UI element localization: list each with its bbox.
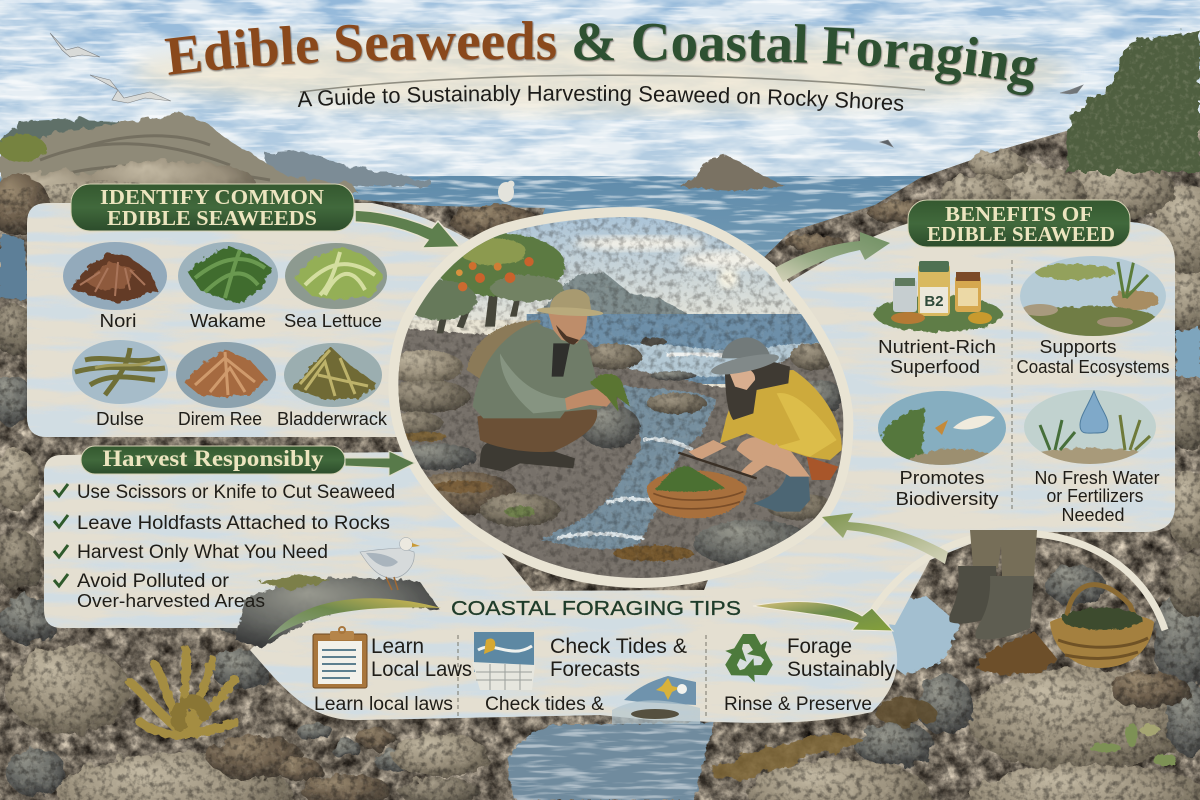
label: promotes biodiversity xyxy=(896,467,999,509)
text: check tides caption: Check tides & xyxy=(485,694,604,715)
label: supports coastal ecosystems xyxy=(1016,336,1170,377)
banner: benefits of edible seaweed: EDIBLE SEAWEED xyxy=(927,222,1115,246)
label: bladderwrack: Bladderwrack xyxy=(277,408,388,429)
divider xyxy=(1011,260,1013,510)
icon: recycle xyxy=(719,634,778,686)
label: supports coastal ecosystems: Coastal Ecosystems xyxy=(1016,356,1170,377)
gull on distant rock xyxy=(498,180,514,202)
benefit illustration: coastal ecosystem xyxy=(1018,255,1168,338)
scene: stream xyxy=(540,383,717,549)
rock outcrop with seaweed under gull xyxy=(235,574,440,648)
banner: benefits of edible seaweed: BENEFITS OF xyxy=(945,202,1093,226)
label: wakame: Wakame xyxy=(190,310,266,331)
label: no fresh water or fertilizers needed: No Fresh Water xyxy=(1034,467,1160,488)
text: rinse and preserve caption: Rinse & Preserve xyxy=(724,694,872,715)
label: nutrient-rich superfood: Nutrient-Rich xyxy=(878,336,996,357)
arrow: harvest to scene xyxy=(345,451,415,476)
benefit illustration: water drop xyxy=(1024,390,1156,464)
background: stream ripples xyxy=(508,722,715,800)
seaweed thumbnail: sea lettuce xyxy=(285,243,387,309)
icon: tide map xyxy=(472,632,535,690)
text: forage sustainably xyxy=(787,635,895,681)
label: nutrient-rich superfood xyxy=(878,336,996,377)
arrow: vignette to scene xyxy=(822,513,948,564)
benefit illustration: nutrient jars: B2 xyxy=(924,293,944,310)
scene: sticks and basket xyxy=(647,453,757,518)
check item 4: Over-harvested Areas xyxy=(77,591,265,611)
scene: orange tree xyxy=(403,233,565,333)
lower right vignette: boots and basket xyxy=(872,530,1165,675)
scene: sky xyxy=(439,217,800,314)
label: no fresh water or fertilizers needed xyxy=(1034,467,1160,525)
scene: sea xyxy=(527,314,860,384)
swoosh left xyxy=(268,598,441,640)
label: nutrient-rich superfood: Superfood xyxy=(890,356,980,377)
seaweed thumbnail: bladderwrack xyxy=(284,343,382,407)
banner: identify common edible seaweeds: IDENTIFY COMMON xyxy=(100,185,324,209)
divider xyxy=(458,635,706,716)
banner: harvest responsibly xyxy=(81,446,345,474)
central scene: foragers on rocky shore xyxy=(380,210,860,590)
background: tan seaweed shore right xyxy=(709,698,935,786)
title: Edible Seaweeds & Coastal Foraging xyxy=(164,21,1039,98)
gull on rock xyxy=(360,538,420,590)
seaweed thumbnail: nori xyxy=(63,242,167,310)
text: learn local laws caption: Learn local laws xyxy=(314,694,453,715)
label: promotes biodiversity: Promotes xyxy=(900,467,984,488)
text: check tides and forecasts: Forecasts xyxy=(550,658,640,681)
scene: mountain xyxy=(536,272,688,314)
icon: clipboard xyxy=(313,627,367,688)
benefit illustration: biodiversity xyxy=(878,391,1006,465)
panels: cream backdrop xyxy=(27,203,1175,723)
scene: rock clumps xyxy=(383,337,843,567)
scene: man forager xyxy=(467,289,630,472)
text: forage sustainably: Sustainably xyxy=(787,658,895,681)
banner: identify common edible seaweeds xyxy=(71,184,354,231)
check item 2: Leave Holdfasts Attached to Rocks xyxy=(77,513,390,534)
vignette: trousers xyxy=(970,530,1037,578)
banner: identify common edible seaweeds: EDIBLE SEAWEEDS xyxy=(107,206,317,230)
panel: benefits xyxy=(874,255,1170,525)
label: sea lettuce: Sea Lettuce xyxy=(284,310,382,331)
scene: shore rocks base xyxy=(390,327,848,590)
seaweed thumbnail: wakame xyxy=(178,242,278,310)
panel: harvest responsibly checklist xyxy=(54,482,395,611)
label: supports coastal ecosystems: Supports xyxy=(1040,336,1116,357)
label: no fresh water or fertilizers needed: Needed xyxy=(1062,504,1124,525)
banner: harvest responsibly: Harvest Responsibly xyxy=(102,446,324,471)
benefit illustration: nutrient jars xyxy=(874,261,1002,332)
background: foreground water pools xyxy=(0,232,1200,800)
background: coastal tree foliage xyxy=(1066,28,1200,176)
background: shrub on left headland xyxy=(0,134,46,162)
scene: landscape xyxy=(383,210,860,590)
illustration: flag and splash xyxy=(612,676,700,724)
seaweed thumbnail: direm ree xyxy=(176,342,276,408)
arrow: identify to scene xyxy=(355,210,460,248)
label: direm ree: Direm Ree xyxy=(178,408,262,429)
scene: painted grain xyxy=(398,217,844,578)
background: seaweed tuft lower left xyxy=(130,650,235,735)
banner: benefits of edible seaweed xyxy=(908,200,1130,247)
background: sky xyxy=(0,0,1200,300)
label: promotes biodiversity: Biodiversity xyxy=(896,488,999,509)
background: green plant on big rock xyxy=(1089,723,1177,766)
background: sea xyxy=(0,176,1200,306)
label: nori: Nori xyxy=(100,310,136,331)
vignette: boots xyxy=(949,566,1034,640)
background: sea stack xyxy=(680,155,785,191)
gulls in the sky xyxy=(50,33,1083,147)
text: learn local laws: Local Laws xyxy=(371,658,472,681)
check item 4 xyxy=(54,571,265,611)
background: distant headland left xyxy=(0,113,432,195)
vignette: arc frame xyxy=(872,533,1165,630)
title glow xyxy=(130,32,1070,112)
vignette: brown seaweed pile xyxy=(975,632,1058,675)
label: no fresh water or fertilizers needed: or Fertilizers xyxy=(1046,485,1144,506)
text: check tides and forecasts: Check Tides & xyxy=(550,635,687,658)
text: check tides and forecasts xyxy=(550,635,687,681)
seaweed thumbnail: dulse xyxy=(70,338,170,406)
scene: figures and tree xyxy=(403,233,842,518)
scene ring xyxy=(398,217,843,578)
text: learn local laws: Learn xyxy=(371,635,424,658)
heading: coastal foraging tips: COASTAL FORAGING TIPS xyxy=(451,598,741,620)
swoosh right xyxy=(753,601,893,631)
subtitle: A Guide to Sustainably Harvesting Seaweed on Rocky Shores xyxy=(298,84,904,111)
panel: identify seaweeds xyxy=(60,240,390,429)
check item 4: Avoid Polluted or xyxy=(77,571,230,592)
text: learn local laws xyxy=(371,635,472,681)
scene: woman forager xyxy=(688,337,842,512)
panel: coastal foraging tips xyxy=(268,598,895,724)
arrow: scene to benefits xyxy=(775,232,890,282)
check item 1: Use Scissors or Knife to Cut Seaweed xyxy=(77,482,395,503)
check item 3: Harvest Only What You Need xyxy=(77,542,328,563)
vignette: basket xyxy=(1050,585,1154,668)
label: dulse: Dulse xyxy=(96,408,144,429)
title underline xyxy=(300,75,925,92)
text: forage sustainably: Forage xyxy=(787,635,852,658)
